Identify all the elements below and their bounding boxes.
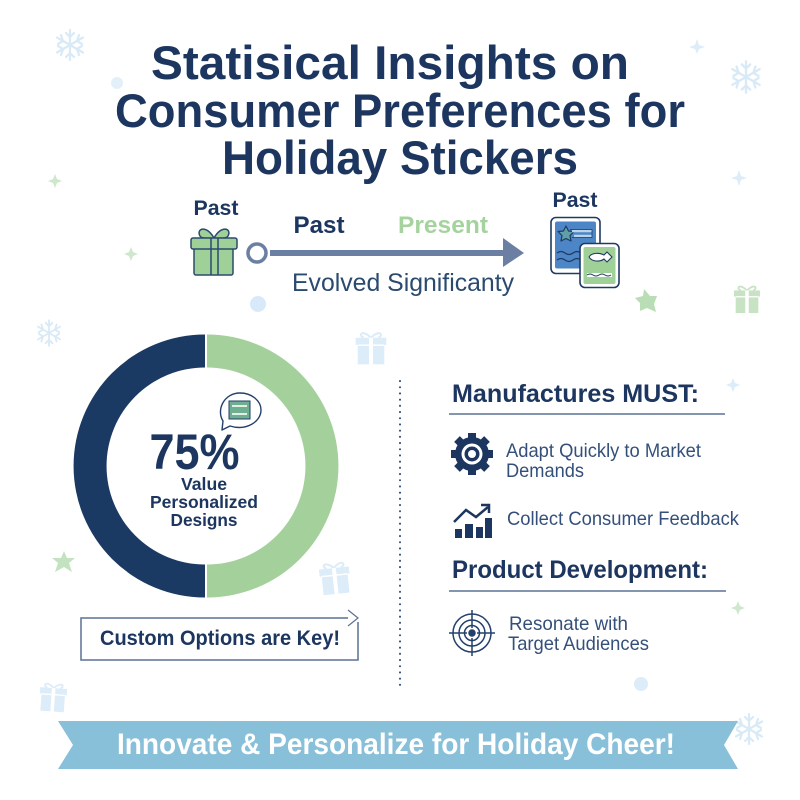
callout: custom options [81, 610, 358, 660]
icon: speech bubble [220, 393, 261, 430]
stat: 75%: 75% [150, 424, 240, 480]
text: collect feedback: Collect Consumer Feedback [507, 508, 739, 530]
title [115, 36, 685, 184]
stat label: Value [181, 474, 227, 494]
banner [58, 721, 738, 769]
icon: chart [454, 505, 492, 538]
dotted divider [399, 381, 401, 686]
panel: product development [449, 556, 726, 656]
label: past above stickers: Past [552, 189, 598, 212]
donut chart [74, 334, 338, 598]
stat label: Designs [170, 510, 238, 530]
text: resonate [508, 613, 649, 655]
icon: stickers [551, 218, 619, 288]
title: Consumer Preferences for [115, 84, 685, 137]
donut: navy segment [74, 334, 205, 598]
stat label: Personalized [150, 492, 258, 512]
banner text: Innovate & Personalize for Holiday Cheer! [117, 728, 675, 761]
label: present on timeline: Present [398, 212, 488, 239]
label: past above gift: Past [194, 197, 239, 220]
title: Statisical Insights on [151, 36, 629, 89]
timeline arrow [270, 238, 524, 267]
icon: gift [191, 229, 237, 275]
stat label [150, 474, 258, 530]
text: resonate: Resonate with [509, 613, 628, 635]
panel: manufacturers must [449, 380, 739, 538]
icon: target [449, 610, 495, 656]
text: resonate: Target Audiences [508, 633, 649, 655]
timeline: past to present [191, 189, 619, 297]
title: Holiday Stickers [222, 131, 578, 184]
donut: green segment [207, 334, 338, 598]
callout: custom options: Custom Options are Key! [100, 627, 340, 650]
label: evolved significanty: Evolved Significanty [292, 269, 514, 297]
heading: Product Development: [452, 556, 708, 584]
label: past on timeline: Past [294, 212, 344, 239]
heading: Manufactures MUST: [452, 380, 699, 408]
timeline start circle [248, 244, 266, 262]
icon: gear [451, 433, 493, 475]
text: adapt quickly [506, 440, 702, 482]
text: adapt quickly: Demands [506, 460, 584, 482]
text: adapt quickly: Adapt Quickly to Market [506, 440, 702, 462]
